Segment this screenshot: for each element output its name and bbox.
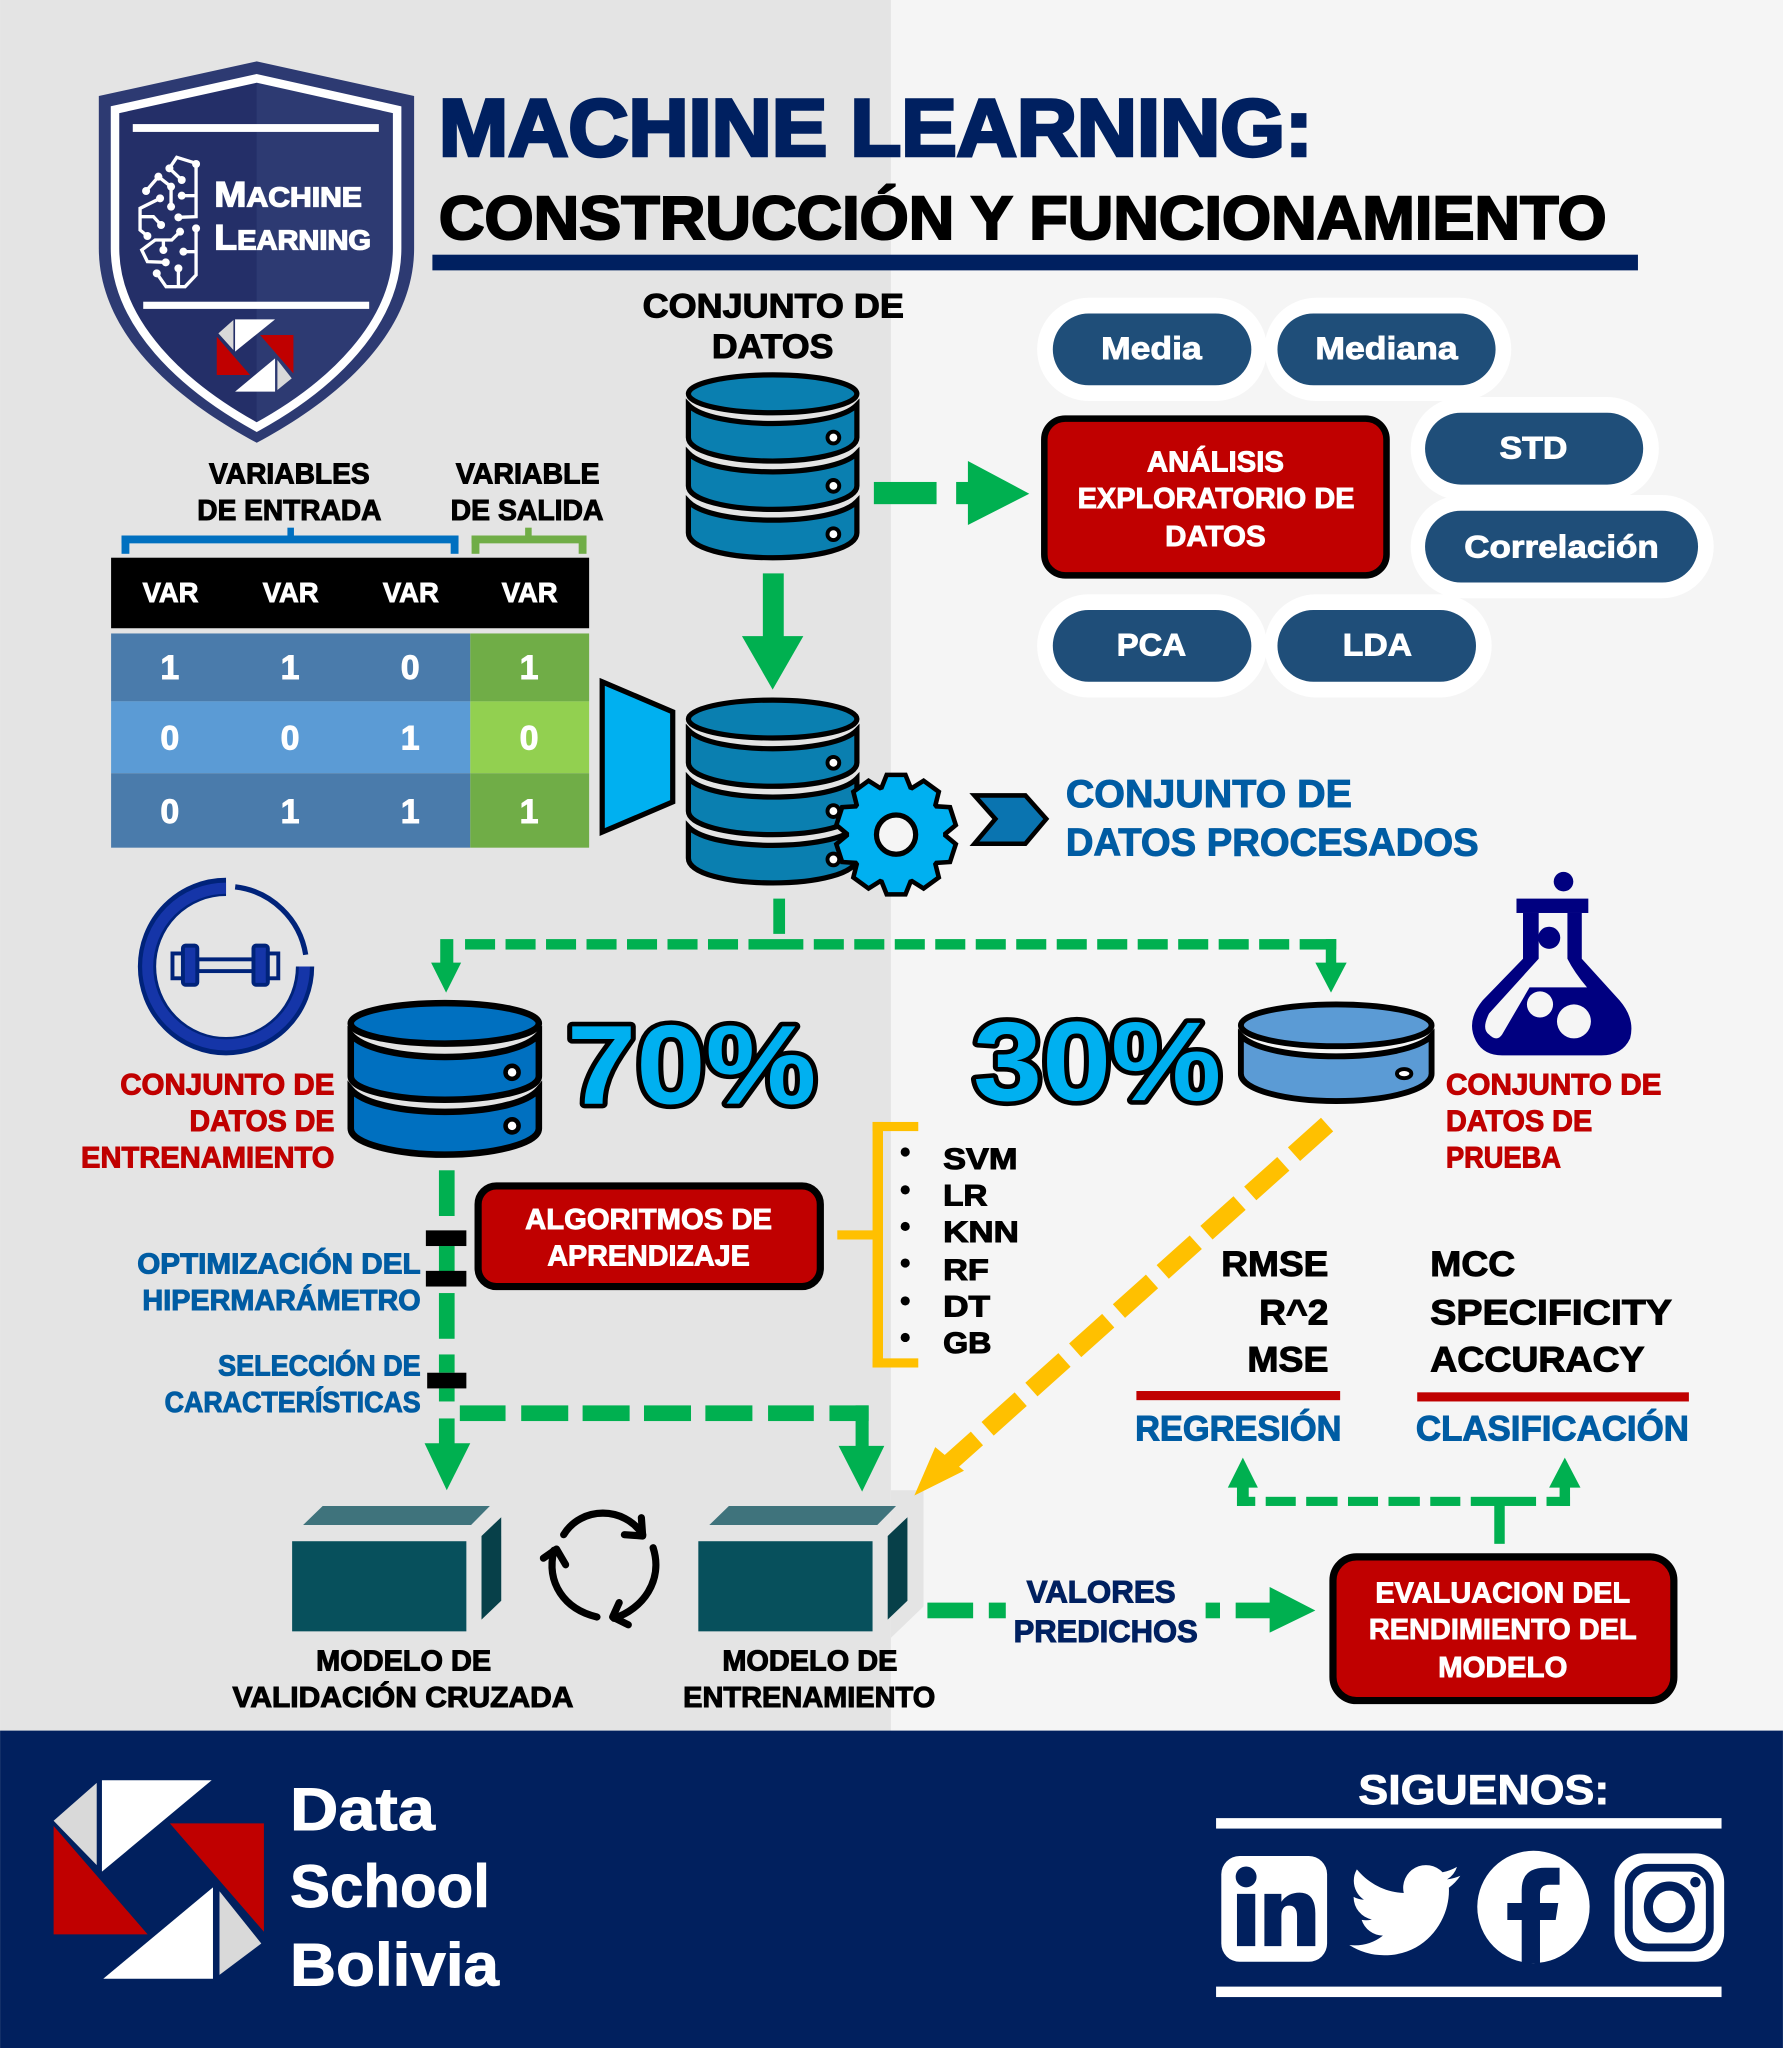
icon: linkedin bbox=[1221, 1856, 1327, 1962]
pill: Correlación bbox=[1411, 495, 1714, 598]
data table: 1 bbox=[160, 649, 179, 687]
label: conjunto de entrenamiento: DATOS DE bbox=[189, 1105, 334, 1138]
icon: funnel bbox=[602, 682, 673, 832]
arrow: split train and test bbox=[431, 899, 1347, 993]
box: análisis exploratorio bbox=[1044, 419, 1387, 575]
data table: VAR bbox=[143, 577, 199, 608]
heading: conjunto de datos bbox=[643, 287, 904, 366]
label: optimización: OPTIMIZACIÓN DEL bbox=[137, 1246, 421, 1280]
brand name bbox=[290, 1776, 500, 1998]
label: datos procesados bbox=[1066, 773, 1479, 865]
box: evaluación: EVALUACION DEL bbox=[1375, 1578, 1630, 1610]
pill: Mediana: Mediana bbox=[1315, 331, 1458, 366]
list: algorithms bbox=[901, 1143, 1019, 1360]
pill: PCA bbox=[1037, 594, 1267, 697]
box: algoritmos de aprendizaje bbox=[478, 1186, 820, 1287]
arrow: predicted values to evaluation bbox=[927, 1587, 1315, 1633]
labels: variables bbox=[197, 458, 604, 527]
pill: Correlación: Correlación bbox=[1464, 530, 1659, 565]
icon: training model bbox=[698, 1506, 907, 1631]
badge text bbox=[214, 175, 371, 257]
data table: 1 bbox=[401, 720, 420, 758]
data table: 1 bbox=[281, 649, 299, 687]
brand name: Data bbox=[290, 1776, 436, 1843]
label: datos procesados: DATOS PROCESADOS bbox=[1066, 822, 1479, 865]
list: algorithms: SVM bbox=[943, 1143, 1018, 1176]
label: conjunto de entrenamiento bbox=[81, 1069, 334, 1175]
labels: variables: VARIABLES bbox=[209, 458, 370, 490]
pill: LDA bbox=[1264, 594, 1492, 697]
data table: VAR bbox=[502, 577, 558, 608]
icon: test database bbox=[1241, 1004, 1432, 1101]
arrow: to training model bbox=[460, 1405, 884, 1492]
title bbox=[432, 83, 1638, 270]
arrow: evaluation to metrics bbox=[1228, 1458, 1580, 1544]
pill: LDA: LDA bbox=[1343, 628, 1412, 663]
pipeline: vertical steps bbox=[426, 1170, 466, 1401]
labels: variables: DE ENTRADA bbox=[197, 495, 381, 527]
metrics: clasificación: ACCURACY bbox=[1430, 1340, 1644, 1379]
labels: variables: VARIABLE bbox=[456, 458, 600, 490]
metrics: regresión bbox=[1135, 1245, 1341, 1449]
box: algoritmos de aprendizaje: ALGORITMOS DE bbox=[525, 1204, 772, 1236]
shield badge: Machine Learning bbox=[99, 61, 414, 443]
arrow: down to processed database bbox=[742, 573, 803, 690]
arrow: to exploratory analysis bbox=[874, 461, 1029, 525]
heading: conjunto de datos: DATOS bbox=[712, 328, 833, 366]
metrics: regresión: R^2 bbox=[1259, 1293, 1328, 1332]
brand name: Bolivia bbox=[290, 1931, 500, 1998]
box: evaluación: RENDIMIENTO DEL bbox=[1369, 1614, 1637, 1646]
label: conjunto de prueba: DATOS DE bbox=[1446, 1105, 1592, 1138]
icon: small logo bbox=[217, 319, 293, 392]
list: algorithms: RF bbox=[943, 1254, 989, 1287]
label: conjunto de prueba: PRUEBA bbox=[1446, 1142, 1561, 1175]
pill: Mediana bbox=[1264, 298, 1511, 401]
label: modelo de validación cruzada: VALIDACIÓN CRUZADA bbox=[233, 1680, 573, 1714]
icon: instagram bbox=[1614, 1853, 1724, 1962]
box: evaluación: MODELO bbox=[1438, 1652, 1567, 1684]
label: selección: SELECCIÓN DE bbox=[218, 1348, 421, 1382]
data table: VAR bbox=[383, 577, 439, 608]
title: CONSTRUCCIÓN Y FUNCIONAMIENTO bbox=[439, 184, 1607, 253]
metrics: regresión: MSE bbox=[1247, 1340, 1328, 1379]
metrics: clasificación: SPECIFICITY bbox=[1430, 1293, 1672, 1332]
list: algorithms: GB bbox=[943, 1327, 991, 1360]
metrics: clasificación: MCC bbox=[1430, 1245, 1515, 1284]
icon: flask bbox=[1472, 872, 1631, 1055]
arrow: test data to training model bbox=[914, 1125, 1327, 1496]
box: algoritmos de aprendizaje: APRENDIZAJE bbox=[547, 1241, 750, 1273]
label: conjunto de prueba: CONJUNTO DE bbox=[1446, 1069, 1661, 1102]
data table: 0 bbox=[401, 649, 420, 687]
label: selección: CARACTERÍSTICAS bbox=[165, 1385, 421, 1419]
data table bbox=[111, 558, 589, 848]
list: algorithms: DT bbox=[943, 1291, 991, 1324]
heading: siguenos: SIGUENOS: bbox=[1358, 1766, 1609, 1813]
box: análisis exploratorio: ANÁLISIS bbox=[1147, 445, 1284, 479]
box: análisis exploratorio: DATOS bbox=[1165, 521, 1266, 553]
label: selección bbox=[165, 1348, 421, 1419]
list: algorithms: LR bbox=[943, 1180, 988, 1213]
footer bbox=[0, 1731, 1783, 2048]
data table: VAR bbox=[263, 577, 319, 608]
data table: 0 bbox=[520, 720, 538, 758]
icon: facebook bbox=[1477, 1851, 1590, 1963]
icon: cross validation model bbox=[292, 1506, 501, 1631]
bracket: output variable bbox=[472, 528, 587, 554]
metrics: clasificación: CLASIFICACIÓN bbox=[1416, 1409, 1689, 1449]
data table: 1 bbox=[281, 793, 299, 831]
box: evaluación bbox=[1333, 1557, 1674, 1701]
icon: source database bbox=[688, 375, 857, 558]
icon: processed database bbox=[688, 700, 857, 883]
title: MACHINE LEARNING: bbox=[439, 83, 1313, 173]
data table: 0 bbox=[160, 720, 179, 758]
icon: dumbbell ring bbox=[147, 887, 306, 1046]
badge text: MACHINE bbox=[214, 175, 362, 214]
icon: twitter bbox=[1349, 1865, 1460, 1955]
pill: STD bbox=[1411, 397, 1659, 500]
label: optimización: HIPERMARÁMETRO bbox=[142, 1283, 421, 1317]
badge text: LEARNING bbox=[214, 218, 371, 257]
icon: circuit brain bbox=[140, 157, 200, 287]
stat: 30%: 30% bbox=[973, 998, 1221, 1124]
icon: cycle arrows bbox=[543, 1513, 656, 1625]
label: conjunto de entrenamiento: CONJUNTO DE bbox=[120, 1069, 334, 1102]
pill: STD: STD bbox=[1500, 430, 1567, 465]
label: modelo de entrenamiento: MODELO DE bbox=[722, 1646, 897, 1678]
heading: conjunto de datos: CONJUNTO DE bbox=[643, 287, 904, 325]
label: conjunto de prueba bbox=[1446, 1069, 1661, 1175]
label: modelo de validación cruzada: MODELO DE bbox=[316, 1646, 491, 1678]
metrics: clasificación bbox=[1416, 1245, 1689, 1449]
logo: Data School Bolivia bbox=[54, 1780, 264, 1979]
icon: gear bbox=[837, 777, 955, 892]
brand name: School bbox=[290, 1853, 490, 1920]
label: valores predichos: PREDICHOS bbox=[1014, 1614, 1198, 1649]
stat: 70%: 70% bbox=[567, 1002, 816, 1128]
pill: Media: Media bbox=[1101, 331, 1202, 366]
label: conjunto de entrenamiento: ENTRENAMIENTO bbox=[81, 1142, 334, 1175]
data table: 1 bbox=[520, 793, 538, 831]
label: datos procesados: CONJUNTO DE bbox=[1066, 773, 1352, 816]
bracket: input variables bbox=[122, 528, 459, 554]
bracket: algorithms bbox=[837, 1122, 918, 1368]
data table: 1 bbox=[520, 649, 538, 687]
label: modelo de entrenamiento: ENTRENAMIENTO bbox=[683, 1682, 935, 1714]
icon: chevron bbox=[974, 795, 1046, 844]
metrics: regresión: RMSE bbox=[1221, 1245, 1328, 1284]
pill: Media bbox=[1037, 298, 1267, 401]
label: modelo de validación cruzada bbox=[233, 1646, 573, 1714]
data table: 1 bbox=[401, 793, 420, 831]
label: optimización bbox=[137, 1246, 421, 1317]
icon: training database bbox=[351, 1003, 539, 1155]
box: análisis exploratorio: EXPLORATORIO DE bbox=[1078, 483, 1355, 515]
list: algorithms: KNN bbox=[943, 1216, 1019, 1249]
data table: 0 bbox=[281, 720, 299, 758]
label: valores predichos: VALORES bbox=[1027, 1575, 1176, 1610]
data table: 0 bbox=[160, 793, 179, 831]
label: valores predichos bbox=[1014, 1575, 1198, 1649]
metrics: regresión: REGRESIÓN bbox=[1135, 1409, 1341, 1449]
pill: PCA: PCA bbox=[1117, 628, 1186, 663]
labels: variables: DE SALIDA bbox=[451, 495, 604, 527]
label: modelo de entrenamiento bbox=[683, 1646, 935, 1714]
arrow: to cross validation model bbox=[425, 1418, 470, 1490]
